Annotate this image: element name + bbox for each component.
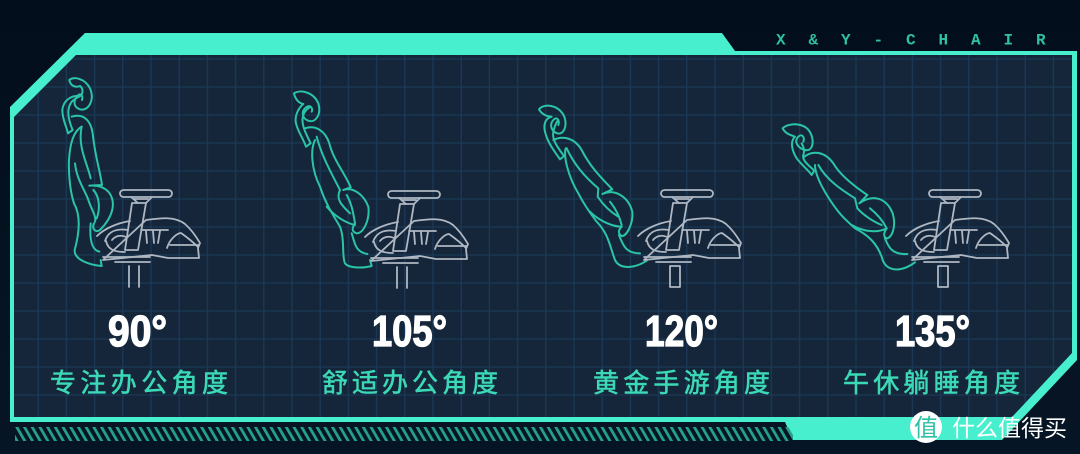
chair back 90 xyxy=(62,78,113,266)
hatch strip xyxy=(15,427,793,441)
label: mobile gaming angle: 黄金手游角度 xyxy=(593,368,770,398)
chair back 135 xyxy=(783,124,915,269)
panel: grid background xyxy=(14,55,1072,417)
angle: 120: 120° xyxy=(645,307,718,356)
label: comfortable office angle: 舒适办公角度 xyxy=(322,368,498,398)
label: focus office angle: 专注办公角度 xyxy=(50,368,228,398)
angle: 105: 105° xyxy=(372,307,447,356)
chair: 90 degrees xyxy=(62,78,200,287)
chair back 105 xyxy=(294,92,372,268)
label: nap angle: 午休躺睡角度 xyxy=(843,368,1020,398)
watermark text: 什么值得买 xyxy=(952,415,1067,441)
watermark logo: 值 xyxy=(914,408,938,443)
chair seat 135 xyxy=(906,190,1009,287)
chair seat 105 xyxy=(365,191,468,288)
angle: 90: 90° xyxy=(108,307,167,356)
chair: 120 degrees xyxy=(539,106,741,287)
angle: 135: 135° xyxy=(895,307,970,356)
chair: 105 degrees xyxy=(294,92,468,288)
chair seat 120 xyxy=(638,190,741,287)
brand text: X&Y-CHAIR xyxy=(776,32,1069,50)
chair: 135 degrees xyxy=(783,124,1009,287)
chair back 120 xyxy=(539,106,647,267)
chair seat 90 xyxy=(97,190,200,287)
